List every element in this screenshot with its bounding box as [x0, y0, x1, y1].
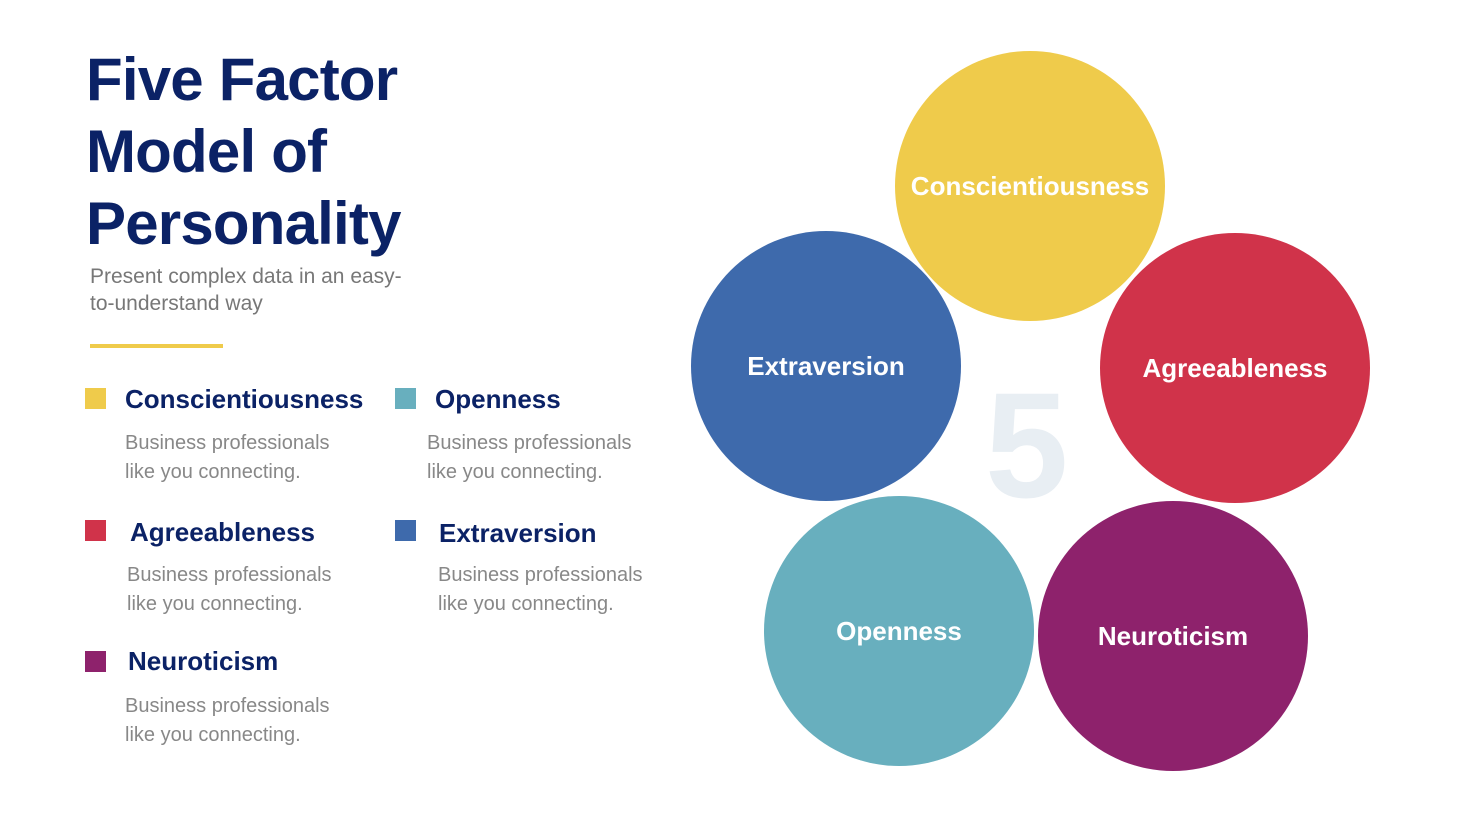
title: Personality — [86, 190, 401, 257]
subtitle: to-understand way — [90, 292, 263, 315]
description: Business professionals — [127, 564, 332, 586]
circle: neuroticism — [1038, 501, 1308, 771]
description: like you connecting. — [125, 461, 301, 483]
subtitle: Present complex data in an easy- — [90, 265, 402, 288]
subtitle — [90, 265, 402, 315]
title — [86, 46, 402, 257]
description: like you connecting. — [427, 461, 603, 483]
description: Business professionals — [125, 695, 330, 717]
circle: extraversion: Extraversion — [747, 350, 905, 380]
heading: Extraversion — [439, 518, 597, 548]
description: like you connecting. — [127, 593, 303, 615]
description — [427, 432, 632, 483]
legend: extraversion — [395, 518, 643, 615]
description: like you connecting. — [438, 593, 614, 615]
description: Business professionals — [438, 564, 643, 586]
legend: agreeableness — [85, 517, 332, 615]
description: Business professionals — [125, 432, 330, 454]
heading: Openness — [435, 384, 561, 414]
icon: red square — [85, 520, 106, 541]
legend: openness — [395, 384, 632, 483]
description: like you connecting. — [125, 724, 301, 746]
circle: conscientiousness — [895, 51, 1165, 321]
heading: Conscientiousness — [125, 384, 363, 414]
circle: openness — [764, 496, 1034, 766]
description — [125, 695, 330, 746]
circle: extraversion — [691, 231, 961, 501]
description — [438, 564, 643, 615]
title: Five Factor — [86, 46, 397, 113]
circle: agreeableness: Agreeableness — [1142, 352, 1327, 382]
circle: neuroticism: Neuroticism — [1098, 620, 1248, 650]
icon: blue square — [395, 520, 416, 541]
icon: yellow square — [85, 388, 106, 409]
yellow accent line — [90, 344, 223, 348]
description — [125, 432, 330, 483]
description — [127, 564, 332, 615]
description: Business professionals — [427, 432, 632, 454]
legend: conscientiousness — [85, 384, 363, 483]
circle: conscientiousness: Conscientiousness — [911, 170, 1149, 200]
legend: neuroticism — [85, 646, 330, 746]
icon: purple square — [85, 651, 106, 672]
faint number 5: 5 — [985, 361, 1068, 529]
title: Model of — [86, 118, 326, 185]
circle: openness: Openness — [836, 616, 962, 646]
icon: teal square — [395, 388, 416, 409]
heading: Agreeableness — [130, 517, 315, 547]
heading: Neuroticism — [128, 646, 278, 676]
circle: agreeableness — [1100, 233, 1370, 503]
